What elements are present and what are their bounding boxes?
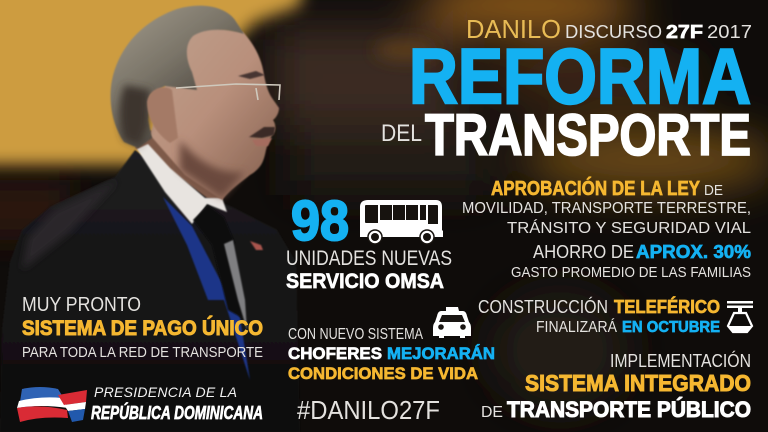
text block: choferes: MEJORARÁN	[387, 344, 495, 363]
logo: presidencia: REPÚBLICA DOMINICANA	[91, 402, 263, 423]
text block: ley de movilidad: APROBACIÓN DE LA LEY	[491, 176, 701, 200]
header: discurso line: DISCURSO	[565, 22, 662, 42]
text block: choferes	[288, 326, 495, 383]
text block: ley de movilidad: TRÁNSITO Y SEGURIDAD VIAL	[507, 220, 751, 237]
ear	[147, 87, 178, 143]
neck	[135, 130, 240, 200]
text block: ley de movilidad: MOVILIDAD, TRANSPORTE TERRESTRE,	[462, 200, 751, 217]
suit	[0, 150, 300, 432]
text block: choferes: CHOFERES	[288, 345, 382, 363]
text block: sistema integrado	[481, 350, 751, 422]
text block: teleférico: EN OCTUBRE	[622, 319, 720, 336]
text block: sistema integrado: SISTEMA INTEGRADO	[525, 370, 751, 396]
text block: choferes: CONDICIONES DE VIDA	[288, 365, 478, 383]
stat: 98 unidades	[286, 189, 452, 293]
icon: flag	[17, 387, 87, 422]
glasses	[176, 84, 280, 100]
text block: sistema de pago único	[22, 293, 263, 361]
text block: ahorro: AHORRO DE	[533, 242, 634, 262]
text block: sistema de pago único: PARA TODA LA RED DE TRANSPORTE	[22, 344, 263, 361]
text block: ahorro: APROX. 30%	[636, 242, 751, 262]
cheek shade	[180, 140, 245, 198]
eyebrow	[238, 71, 265, 79]
text block: sistema integrado: DE	[481, 404, 503, 421]
jacket highlight	[22, 180, 118, 270]
title: DEL	[381, 120, 422, 147]
dark hair lower	[120, 85, 150, 146]
stat: 98 unidades: 98	[291, 189, 349, 253]
text block: sistema integrado: TRANSPORTE PÚBLICO	[507, 397, 751, 422]
header: discurso line: 2017	[707, 22, 752, 42]
header: discurso line: 27F	[666, 22, 703, 42]
sash	[163, 197, 250, 380]
lapel pin	[250, 241, 263, 250]
text block: teleférico: CONSTRUCCIÓN	[478, 296, 608, 317]
text block: sistema de pago único: SISTEMA DE PAGO ÚNICO	[22, 316, 263, 340]
text block: choferes: CON NUEVO SISTEMA	[288, 326, 424, 343]
shirt collar	[137, 144, 227, 224]
photo: speaker	[0, 6, 300, 432]
hashtag: #DANILO27F	[297, 395, 440, 425]
stat: 98 unidades: UNIDADES NUEVAS	[286, 247, 452, 270]
shirt strip	[224, 240, 247, 330]
text block: ley de movilidad: DE	[704, 182, 723, 199]
text block: teleférico: FINALIZARÁ	[536, 319, 618, 336]
hair	[110, 6, 244, 148]
icon: bus	[360, 200, 443, 244]
head	[150, 26, 279, 200]
text block: ahorro	[511, 242, 751, 281]
mustache	[249, 127, 275, 138]
text block: sistema integrado: IMPLEMENTACIÓN	[610, 350, 751, 371]
lip	[252, 138, 272, 146]
text block: teleférico	[478, 296, 720, 336]
tie	[193, 205, 246, 320]
icon: taxi	[433, 307, 471, 338]
logo: presidencia	[17, 384, 263, 423]
text block: teleférico: TELEFÉRICO	[614, 296, 720, 317]
title	[381, 32, 751, 168]
text block: ahorro: GASTO PROMEDIO DE LAS FAMILIAS	[511, 265, 751, 281]
stat: 98 unidades: SERVICIO OMSA	[286, 270, 444, 293]
icon: teleférico	[727, 301, 753, 333]
logo: presidencia: PRESIDENCIA DE LA	[94, 384, 237, 400]
text block: sistema de pago único: MUY PRONTO	[22, 293, 141, 316]
header: discurso line	[466, 14, 752, 44]
header: discurso line: DANILO	[466, 14, 561, 44]
text block: ley de movilidad	[462, 176, 751, 237]
